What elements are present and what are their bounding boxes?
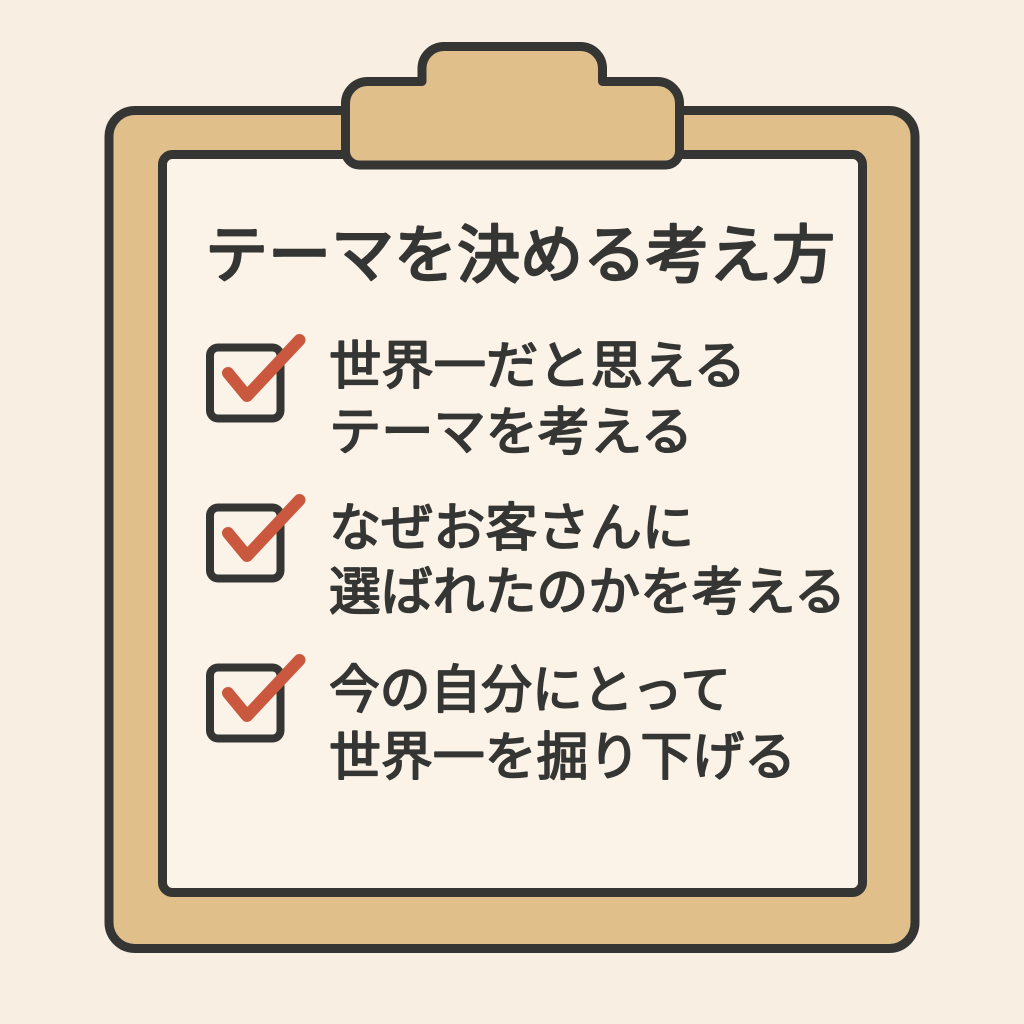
- item 3 text: 今の自分にとって: [329, 662, 731, 720]
- paper panel: [162, 154, 862, 892]
- clipboard board: [109, 110, 915, 948]
- item 1 text: 世界一だと思える: [329, 338, 746, 396]
- checklist item 3: [210, 660, 796, 787]
- icon: checkbox 1: [210, 340, 300, 418]
- item 2 text: 選ばれたのかを考える: [329, 564, 846, 622]
- clipboard clip: [346, 46, 680, 165]
- item 2 text: なぜお客さんに: [329, 500, 694, 558]
- item 1 text: テーマを考える: [329, 404, 693, 462]
- icon: checkbox 3: [210, 660, 300, 738]
- icon: checkbox 2: [210, 500, 300, 578]
- checklist item 2: [210, 500, 846, 622]
- title: テーマを決める考え方: [205, 221, 835, 291]
- checklist item 1: [210, 338, 760, 462]
- item 3 text: 世界一を掘り下げる: [329, 729, 796, 787]
